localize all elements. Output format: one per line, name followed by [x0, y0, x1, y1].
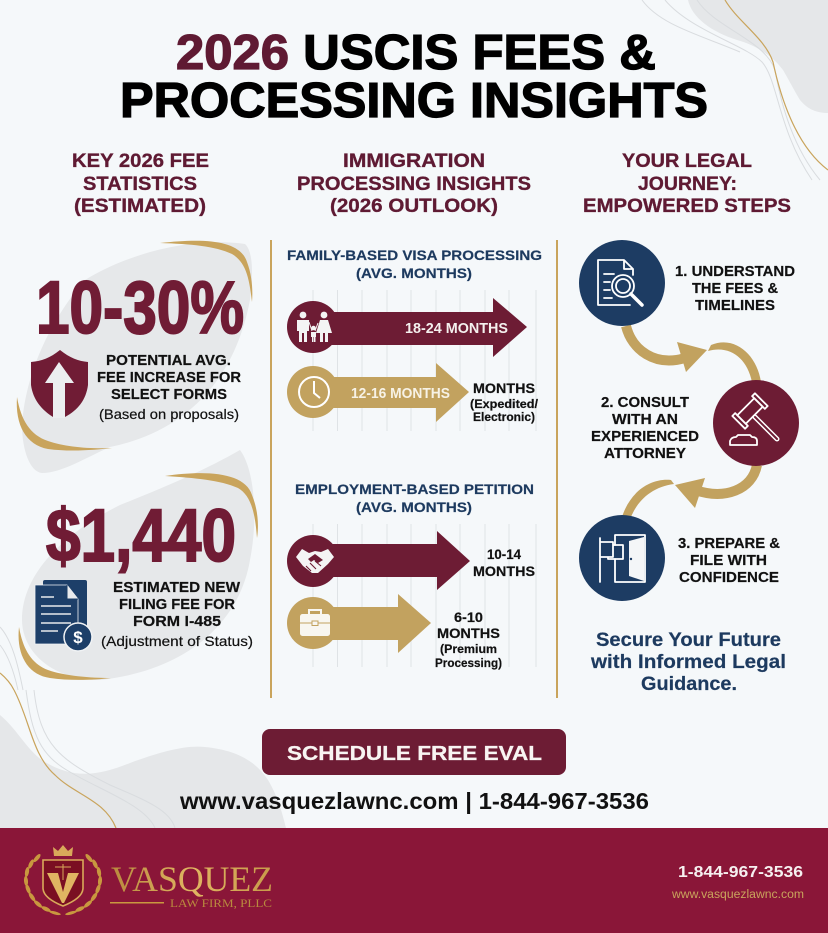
column heading: key fee statistics: (ESTIMATED) — [74, 195, 206, 217]
stat description: (Adjustment of Status) — [101, 633, 253, 649]
icon: clock — [299, 377, 329, 407]
column heading: legal journey: YOUR LEGAL — [622, 150, 752, 172]
column heading: key fee statistics: KEY 2026 FEE — [72, 150, 209, 172]
gold swoosh bottom — [17, 397, 112, 451]
logo crest — [24, 845, 102, 916]
panel: 10-30% statistic — [17, 241, 252, 473]
arrow: step 2 to step 3 — [622, 465, 757, 517]
column heading: processing insights — [297, 150, 531, 217]
column heading: key fee statistics — [72, 150, 209, 217]
step 2 text: WITH AN — [612, 412, 678, 428]
footer band — [0, 828, 828, 933]
stat description: FEE INCREASE FOR — [97, 370, 242, 386]
background decoration: top right — [642, 0, 828, 180]
panel heading: (AVG. MONTHS) — [356, 499, 472, 515]
vertical column divider right — [556, 240, 558, 698]
step 1 text: 1. UNDERSTAND — [675, 264, 795, 280]
label: 6-10 months: 6-10 — [454, 610, 483, 625]
bar: 12-16 months: 12-16 MONTHS — [351, 386, 450, 402]
column heading: legal journey: JOURNEY: — [638, 173, 737, 195]
label: expedited months: Electronic) — [473, 412, 535, 424]
step 2 text: ATTORNEY — [604, 446, 686, 462]
bar: 18-24 months: 18-24 MONTHS — [405, 321, 508, 337]
laurel right — [65, 853, 102, 916]
call to action button: SCHEDULE FREE EVAL — [287, 743, 542, 765]
label: 6-10 months: Processing) — [435, 658, 502, 670]
step 1 text: TIMELINES — [695, 298, 775, 314]
panel heading: FAMILY-BASED VISA PROCESSING — [287, 247, 542, 263]
crown — [53, 845, 73, 856]
icon: family — [297, 312, 332, 342]
step 1 icon: document and magnifier — [579, 240, 665, 326]
stat description: (Based on proposals) — [99, 406, 239, 422]
tagline: with Informed Legal — [590, 652, 786, 673]
logo wordmark: VASQUEZ — [111, 859, 273, 899]
stat description: FILING FEE FOR — [119, 597, 236, 613]
bar: 18-24 months — [287, 298, 527, 357]
icon: document with dollar: $ — [73, 628, 83, 647]
column heading: legal journey: EMPOWERED STEPS — [583, 195, 791, 217]
bar: 12-16 months — [287, 363, 469, 422]
logo wordmark: LAW FIRM, PLLC — [170, 896, 272, 910]
panel heading: EMPLOYMENT-BASED PETITION — [295, 481, 534, 497]
step 1 text — [675, 264, 795, 314]
icon: document with dollar — [35, 580, 92, 651]
stat description: POTENTIAL AVG. — [106, 353, 231, 369]
tagline: Guidance. — [641, 674, 737, 695]
title — [120, 26, 708, 128]
column heading: key fee statistics: STATISTICS — [83, 173, 197, 195]
icon: briefcase — [300, 610, 330, 636]
icon: shield with arrow — [31, 350, 88, 418]
footer website: www.vasquezlawnc.com — [671, 889, 804, 901]
bar: 10-14 months — [287, 531, 470, 590]
stat description: SELECT FORMS — [111, 387, 227, 403]
vertical column divider left — [270, 240, 272, 698]
title: 2026 USCIS FEES & — [176, 26, 656, 80]
panel heading — [287, 247, 542, 281]
column heading: processing insights: (2026 OUTLOOK) — [330, 195, 498, 217]
panel heading — [295, 481, 534, 515]
column heading: processing insights: PROCESSING INSIGHTS — [297, 173, 531, 195]
step 3 text: FILE WITH — [690, 553, 767, 569]
panel: family-based visa processing — [287, 247, 542, 431]
panel heading: (AVG. MONTHS) — [356, 265, 472, 281]
column heading: legal journey — [583, 150, 791, 217]
step 2 text: EXPERIENCED — [591, 429, 699, 445]
label: expedited months: MONTHS — [473, 381, 535, 396]
label: expedited months: (Expedited/ — [470, 399, 539, 411]
label: 10-14 months: MONTHS — [473, 564, 535, 579]
label: expedited months — [470, 381, 539, 424]
label: 6-10 months: (Premium — [440, 644, 497, 656]
label: 6-10 months: MONTHS — [437, 626, 500, 641]
footer phone: 1-844-967-3536 — [678, 864, 803, 881]
stat description — [101, 580, 253, 649]
label: 6-10 months — [435, 610, 502, 670]
step 2 text: 2. CONSULT — [601, 395, 689, 411]
background blob — [22, 450, 254, 680]
gold swoosh bottom — [19, 627, 111, 680]
tagline: Secure Your Future — [596, 630, 781, 651]
step 3 text: 3. PREPARE & — [678, 536, 781, 552]
panel: employment-based petition — [287, 481, 536, 670]
bar: 6-10 months — [287, 594, 431, 653]
title: PROCESSING INSIGHTS — [120, 74, 708, 128]
step 3 text — [678, 536, 781, 586]
stat description: FORM I-485 — [133, 614, 221, 630]
big number: $1,440 — [46, 494, 236, 577]
stat description — [97, 353, 242, 422]
column heading: processing insights: IMMIGRATION — [343, 150, 485, 172]
icon: handshake — [296, 549, 334, 573]
panel: legal journey steps — [579, 240, 799, 695]
label: 10-14 months — [473, 547, 535, 579]
laurel left — [24, 853, 61, 916]
tagline — [590, 630, 786, 695]
step 2 text — [591, 395, 699, 462]
step 2 icon: gavel — [713, 380, 799, 466]
step 3 icon: flag and door — [579, 515, 665, 601]
stat description: ESTIMATED NEW — [113, 580, 240, 596]
background decoration: bottom left — [0, 627, 286, 828]
gold swoosh top — [160, 241, 252, 302]
background blob — [22, 242, 252, 473]
arrow: step 1 to step 2 — [626, 326, 761, 382]
step 1 text: THE FEES & — [692, 281, 779, 297]
panel: $1,440 statistic — [19, 450, 258, 680]
big number: 10-30% — [36, 266, 244, 349]
shield — [43, 860, 83, 906]
call to action button — [262, 729, 566, 775]
contact line: www.vasquezlawnc.com | 1-844-967-3536 — [179, 788, 649, 814]
step 3 text: CONFIDENCE — [679, 570, 779, 586]
gold swoosh top — [165, 473, 258, 538]
V mark — [47, 873, 79, 903]
label: 10-14 months: 10-14 — [487, 547, 521, 562]
